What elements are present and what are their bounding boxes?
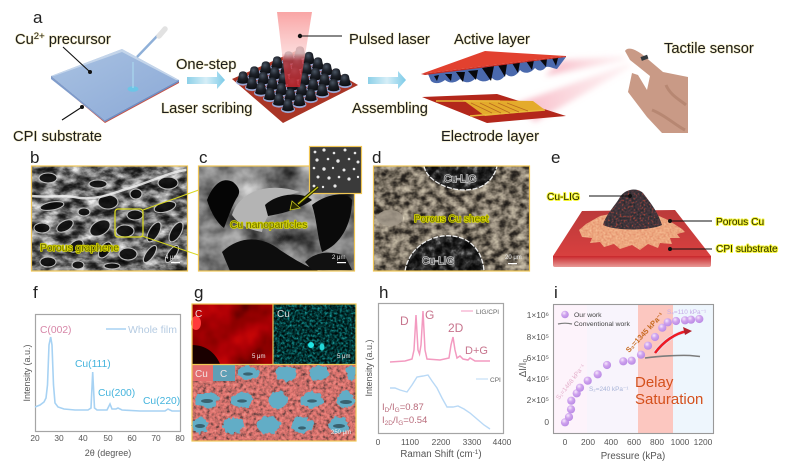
label: Tactile sensor: Tactile sensor [664, 41, 754, 57]
label: CPI substrate: CPI substrate [716, 244, 778, 255]
legend: LIG/CPI [461, 309, 499, 316]
merged Cu C map: Cu [195, 369, 208, 380]
x axis title: ) [478, 449, 482, 460]
x axis ticks: 400 [604, 437, 618, 447]
x axis ticks: 200 [581, 437, 595, 447]
sensitivity labels: S₄=110 kPa⁻¹ [667, 309, 706, 316]
C map [191, 304, 273, 364]
sensitivity labels: S₂=240 kPa⁻¹ [589, 386, 628, 393]
panel d: SEM porous Cu sheet [372, 148, 530, 271]
C map: 5 μm [252, 354, 265, 360]
label: Cu2+ precursor [15, 31, 111, 74]
Cu map: 5 μm [337, 354, 350, 360]
scale bar: 20 um: 20 μm [505, 255, 522, 261]
SEM image b [31, 166, 188, 271]
active layer [421, 51, 566, 83]
Cu-LIG dome [603, 190, 662, 230]
label: Cu2+ precursor: Cu [15, 32, 34, 48]
panel e: Cu-LIG structure schematic [547, 148, 778, 267]
arrow to nanoparticles [290, 187, 318, 210]
panel h: Raman chart [364, 283, 512, 460]
peak labels: D+G [465, 345, 488, 357]
intensity ratios: D [385, 407, 390, 414]
legend [558, 311, 631, 328]
peak labels: Cu(220) [143, 396, 180, 407]
label: Active layer: Active layer [454, 32, 530, 48]
SEM image c [198, 166, 354, 271]
electrode layer [422, 94, 566, 123]
x axis ticks: 70 [151, 433, 161, 443]
panel letter g: g [194, 283, 203, 302]
intensity ratios: G [395, 407, 400, 414]
label: Pulsed laser: Pulsed laser [349, 32, 430, 48]
label: Cu2+ precursor: 2+ [34, 31, 45, 42]
legend: LIG/CPI: LIG/CPI [476, 309, 499, 316]
label: Porous Cu: Porous Cu [716, 217, 764, 228]
scale bar: 2 um: 2 μm [332, 255, 345, 261]
label: Cu-LIG upper: Cu-LIG [444, 174, 476, 185]
legend: Whole film [106, 324, 177, 336]
sensitivity labels [555, 309, 706, 401]
label: Cu-LIG [547, 192, 632, 203]
panel borders [192, 304, 356, 441]
panel f: XRD chart [22, 283, 185, 458]
label: Cu-LIG lower: Cu-LIG [422, 256, 454, 267]
x axis title: 2θ (degree) [85, 448, 131, 458]
y axis title: ΔI/I₀ [518, 359, 529, 377]
C map: C [195, 309, 202, 320]
label: Laser scribing: Laser scribing [161, 101, 252, 117]
LIG/CPI curve [390, 311, 490, 362]
y axis ticks: 2×10⁵ [527, 395, 549, 405]
legend: Whole film: Whole film [128, 324, 177, 336]
precursor coated plate illustration [51, 49, 179, 123]
legend: Our work [574, 312, 602, 319]
intensity ratios: G [398, 420, 403, 427]
x axis ticks: 4400 [493, 437, 512, 447]
x axis ticks [30, 433, 185, 443]
our work data points [561, 315, 703, 426]
label: CPI substrate [668, 244, 778, 255]
panel letter h: h [379, 283, 388, 302]
intensity ratios: /I [393, 415, 398, 426]
legend: CPI [476, 377, 501, 384]
x axis ticks: 80 [175, 433, 185, 443]
XRD curve [35, 337, 180, 411]
peak labels: G [425, 308, 434, 322]
x axis ticks: 3300 [463, 437, 482, 447]
y axis ticks: 1×10⁶ [527, 310, 549, 320]
y axis title: Intensity (a.u.) [22, 344, 32, 402]
intensity ratios [382, 402, 427, 427]
label: Cu-LIG: Cu-LIG [547, 192, 580, 203]
panel a: fabrication process [13, 8, 754, 145]
x axis ticks: 0 [376, 437, 381, 447]
intensity ratios: =0.87 [400, 402, 424, 413]
SEM image d [373, 166, 530, 271]
beams to fingertip [515, 56, 632, 122]
y axis title: Intensity (a.u.) [364, 339, 374, 397]
panel letter b: b [30, 148, 39, 167]
y axis ticks: 8×10⁵ [527, 332, 549, 342]
intensity ratios: =0.54 [403, 415, 427, 426]
merged Cu C map: C [220, 369, 227, 380]
zoom box and leader lines [115, 182, 221, 262]
x axis ticks: 0 [563, 437, 568, 447]
scale bar: 4 um: 4 μm [165, 255, 178, 261]
x axis ticks: 1100 [401, 437, 419, 447]
intensity ratios: I [382, 415, 385, 426]
merged Cu C map [192, 365, 356, 441]
label: Pulsed laser [298, 32, 430, 48]
CPI slab [553, 210, 711, 267]
plot frame [36, 314, 180, 432]
panel g: elemental mapping [191, 283, 356, 441]
sensitivity labels: S₃=1345 kPa⁻¹ [624, 310, 666, 354]
intensity ratios: /I [389, 402, 395, 413]
panel letter a: a [33, 8, 43, 27]
x axis ticks: 2200 [432, 437, 451, 447]
x axis ticks: 1000 [671, 437, 690, 447]
label: Assembling: Assembling [352, 101, 428, 117]
x axis ticks: 600 [627, 437, 641, 447]
Cu map [273, 304, 356, 364]
x axis ticks: 60 [127, 433, 137, 443]
peak labels: D [400, 314, 409, 328]
legend: Conventional work [574, 321, 631, 328]
x axis ticks: 20 [30, 433, 40, 443]
y axis ticks: 0 [544, 417, 549, 427]
y axis ticks [527, 310, 549, 427]
label: Cu nanoparticles: Cu nanoparticles [230, 220, 307, 231]
peak labels: 2D [448, 321, 464, 335]
icon: dropper [137, 29, 165, 57]
porous Cu skirt [579, 212, 685, 250]
panel letter e: e [551, 148, 560, 167]
panel i: pressure response chart [518, 283, 714, 462]
panel letter i: i [554, 283, 558, 302]
peak labels: Cu(200) [98, 388, 135, 399]
x axis title: Pressure (kPa) [601, 451, 665, 462]
panel letter d: d [372, 148, 381, 167]
label: Porous graphene: Porous graphene [40, 243, 119, 254]
x axis ticks [376, 437, 512, 447]
arrow: assembling [368, 71, 406, 89]
label: Porous Cu sheet: Porous Cu sheet [414, 214, 489, 225]
peak labels: C(002) [40, 325, 71, 336]
plot frame [554, 304, 714, 434]
callout: Delay Saturation: Saturation [635, 391, 703, 408]
legend: CPI: CPI [490, 377, 501, 384]
x axis ticks: 50 [103, 433, 113, 443]
panel letter c: c [199, 148, 208, 167]
label: CPI substrate [13, 105, 102, 145]
Cu map: Cu [277, 309, 290, 320]
panel letter f: f [33, 283, 38, 302]
peak labels: Cu(111) [75, 359, 111, 370]
scale bar: 20 um [505, 255, 522, 264]
x axis ticks: 30 [54, 433, 64, 443]
arrow: one-step laser scribing [187, 71, 225, 89]
inset SEM nanoparticles [309, 146, 362, 194]
x axis ticks: 40 [78, 433, 88, 443]
peak labels [40, 325, 180, 407]
y axis ticks: 6×10⁵ [527, 353, 549, 363]
x axis title: -1 [473, 449, 479, 456]
hand wearing sensor [625, 49, 688, 133]
plot frame [378, 304, 504, 434]
arrow: delayed saturation trend [655, 327, 692, 353]
sensitivity region bands [553, 304, 713, 433]
x axis ticks: 800 [650, 437, 664, 447]
label: One-step: One-step [176, 57, 236, 73]
x axis ticks [563, 437, 713, 447]
conventional work curve [645, 355, 700, 358]
y axis ticks: 4×10⁵ [527, 374, 549, 384]
x axis title: Raman Shift (cm [400, 449, 473, 460]
laser beam [277, 12, 312, 87]
sensitivity labels: S₁=1468 kPa⁻¹ [555, 363, 587, 401]
label: CPI substrate: CPI substrate [13, 129, 102, 145]
panel c: SEM Cu nanoparticles [198, 146, 362, 271]
label: Porous Cu [668, 217, 764, 228]
panel b: SEM porous graphene [30, 148, 221, 271]
intensity ratios: 2D [385, 420, 393, 427]
label: Electrode layer: Electrode layer [441, 129, 539, 145]
label: Cu2+ precursor: precursor [45, 32, 111, 48]
peak labels [400, 308, 488, 357]
scale bar: 4 um [165, 255, 180, 263]
x axis ticks: 1200 [694, 437, 713, 447]
laser-scribed bump array [232, 46, 358, 123]
intensity ratios: I [382, 402, 385, 413]
CPI curve [390, 375, 490, 429]
callout: Delay Saturation [635, 374, 703, 408]
callout: Delay Saturation: Delay [635, 374, 674, 391]
merged Cu C map: 250 μm [331, 430, 351, 436]
